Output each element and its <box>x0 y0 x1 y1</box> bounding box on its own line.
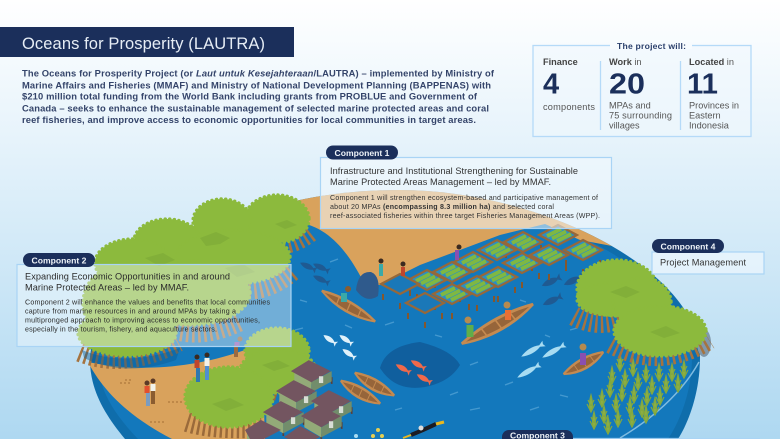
callout: component 1: reef-associated fisheries within three target Fisheries Management Areas (WPP). <box>330 212 600 220</box>
pill: component 2: Component 2 <box>32 255 87 265</box>
callout: component 2: capture from marine resources in and around MPAs by taking a <box>25 308 236 316</box>
sand: north shore <box>296 185 620 285</box>
inner water <box>98 196 692 439</box>
white-blue fish <box>516 341 567 380</box>
intro text <box>22 68 495 125</box>
cast net <box>356 272 379 299</box>
stat: located: Indonesia <box>689 120 730 130</box>
stat: work: 20 <box>609 68 645 100</box>
white fish <box>322 333 357 361</box>
boats with fishers <box>318 286 607 409</box>
pill: component 4: Component 4 <box>661 241 716 251</box>
water sparkles <box>295 259 577 410</box>
intro text: Marine Affairs and Fisheries (MMAF) and Ministry of National Development Planning (BAPPENAS) with <box>22 80 491 90</box>
callout: component 4 <box>652 239 764 274</box>
panel: the project will <box>533 41 751 136</box>
stat: finance: components <box>543 102 595 112</box>
callout: component 2: Expanding Economic Opportunities in and around <box>25 272 230 282</box>
callout: component 1: Marine Protected Areas Management – led by MMAF. <box>330 177 551 187</box>
callout: component 2 <box>17 253 291 346</box>
stat: work: MPAs and <box>609 100 651 110</box>
grey rim <box>697 329 711 357</box>
callout: component 4: Project Management <box>660 258 746 268</box>
stat: finance <box>543 57 595 112</box>
intro text: The Oceans for Prosperity Project (or Laut untuk Kesejahteraan/LAUTRA) – implemented by Ministry of <box>22 68 495 78</box>
water disc <box>90 190 700 439</box>
stat: located <box>687 57 739 130</box>
callout: component 2: Component 2 will enhance the values and benefits that local communities <box>25 298 270 306</box>
sand: west beach <box>88 350 265 439</box>
farm pens <box>381 225 602 328</box>
stat: work: villages <box>609 120 640 130</box>
title: Oceans for Prosperity (LAUTRA) <box>22 35 265 53</box>
stat: finance: Finance <box>543 57 578 67</box>
intro text: reef fisheries, and improve access to economic opportunities for local communities in target areas. <box>22 114 476 125</box>
stat: located: Eastern <box>689 110 721 120</box>
callout: component 1: about 20 MPAs (encompassing 8.3 million ha) and selected coral <box>330 203 554 211</box>
pill: component 2 <box>23 253 95 267</box>
pill: component 1 <box>326 146 398 160</box>
stat: located: Provinces in <box>689 100 739 110</box>
cropped house right <box>284 426 320 439</box>
stat: located: 11 <box>687 68 718 100</box>
callout: component 3 <box>502 430 760 439</box>
title bar <box>0 27 294 57</box>
callout: component 2: multipronged approach to improving access to economic opportunities, <box>25 316 260 324</box>
intro text: Canada – seeks to enhance the sustainable management of selected marine protected areas and coral <box>22 102 489 114</box>
mangroves: east <box>574 260 711 357</box>
intro text: $210 million total funding from the World Bank including grants from PROBLUE and Government of <box>22 90 478 102</box>
stat: work: Work in <box>609 57 642 67</box>
dark fish group <box>299 260 585 308</box>
cropped house left <box>245 420 281 439</box>
callout: component 1: Infrastructure and Institutional Strengthening for Sustainable <box>330 166 578 176</box>
shoreline arc <box>620 362 699 438</box>
pill: component 1: Component 1 <box>335 148 390 158</box>
callout: component 2: Marine Protected Areas – led by MMAF. <box>25 282 189 292</box>
people on shore <box>144 244 462 406</box>
seagrass <box>587 354 688 434</box>
illustration: ocean island scene <box>78 185 711 439</box>
reef fish <box>354 428 384 438</box>
stat: finance: 4 <box>543 68 559 100</box>
diver <box>403 422 444 438</box>
mangroves and village: south-west <box>185 328 352 439</box>
stat: located: Located in <box>689 57 734 67</box>
west beach footprints <box>120 380 182 422</box>
panel heading: The project will: <box>617 41 686 51</box>
callout: component 2: especially in the tourism, fishery, and aquaculture sectors. <box>25 326 217 334</box>
stat: work: 75 surrounding <box>609 110 672 120</box>
houses <box>245 360 352 439</box>
underwater net with red fish <box>380 342 460 388</box>
callout: component 1 <box>320 146 612 228</box>
stat: work <box>609 57 672 130</box>
mangroves: north-west cluster <box>78 195 312 369</box>
callout: component 1: Component 1 will strengthen ecosystem-based and participative management of <box>330 194 598 202</box>
